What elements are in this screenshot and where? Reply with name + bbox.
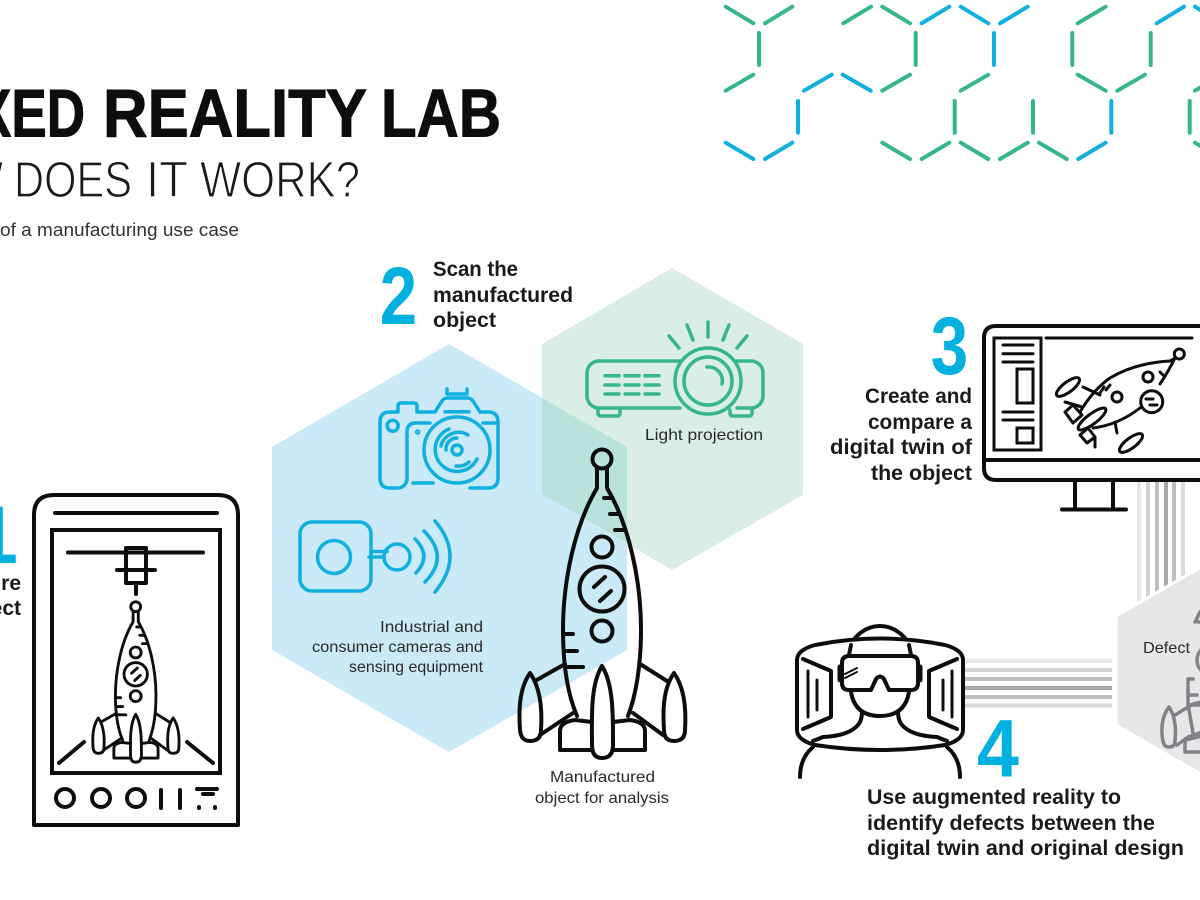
step 4 text: digital twin and original design xyxy=(867,837,1184,860)
icon: manufactured rocket xyxy=(519,450,685,758)
icon: 3D printer xyxy=(34,495,238,825)
icon: monitor xyxy=(984,326,1200,510)
step 3 text: digital twin of xyxy=(830,436,973,459)
title: REALITY xyxy=(103,76,367,152)
title xyxy=(0,75,501,152)
label: light projection: Light projection xyxy=(645,427,763,444)
subtitle: WORK? xyxy=(200,151,360,208)
icon: digital twin rocket xyxy=(1054,349,1184,455)
icon: projector xyxy=(587,322,763,416)
label: defect: Defect xyxy=(1143,640,1191,657)
label: cameras: sensing equipment xyxy=(349,659,484,676)
icon: sensor xyxy=(300,521,450,592)
icon: defect rocket xyxy=(1162,612,1200,752)
panel: defect hexagon xyxy=(1116,541,1200,800)
icon: printed rocket xyxy=(93,602,179,762)
hexagon segment pattern xyxy=(726,7,1200,159)
title: LAB xyxy=(381,76,501,152)
intro text: of a manufacturing use case xyxy=(0,220,239,240)
step 2 number: 2 xyxy=(380,250,417,341)
label: cameras: Industrial and xyxy=(380,619,483,636)
label: cameras: consumer cameras and xyxy=(312,639,483,656)
hexagon overlap xyxy=(542,398,627,543)
label: manufactured object: Manufactured xyxy=(550,769,655,786)
panel: light projection hexagon xyxy=(542,268,803,570)
panel: sensing hexagon xyxy=(272,344,627,752)
step 3 text: compare a xyxy=(868,411,972,434)
step 3 text: Create and xyxy=(865,385,972,408)
step 2 heading: Scan the xyxy=(433,258,518,281)
step 3 number: 3 xyxy=(931,300,968,391)
step 2 heading: manufactured xyxy=(433,284,573,307)
step 3 text: the object xyxy=(871,462,972,485)
step 4 text: identify defects between the xyxy=(867,812,1155,835)
icon: camera xyxy=(380,389,498,488)
subtitle: IT xyxy=(146,151,188,208)
connector: monitor to defect xyxy=(1139,482,1183,606)
icon: AR headset user xyxy=(797,626,963,777)
step 4 number: 4 xyxy=(977,703,1019,794)
connector: defect to headset xyxy=(965,661,1112,706)
subtitle: DOES xyxy=(14,151,132,208)
subtitle xyxy=(0,151,360,208)
step 4 text: Use augmented reality to xyxy=(867,786,1121,809)
step 2 heading: object xyxy=(433,309,496,332)
label: manufactured object: object for analysis xyxy=(535,790,669,807)
